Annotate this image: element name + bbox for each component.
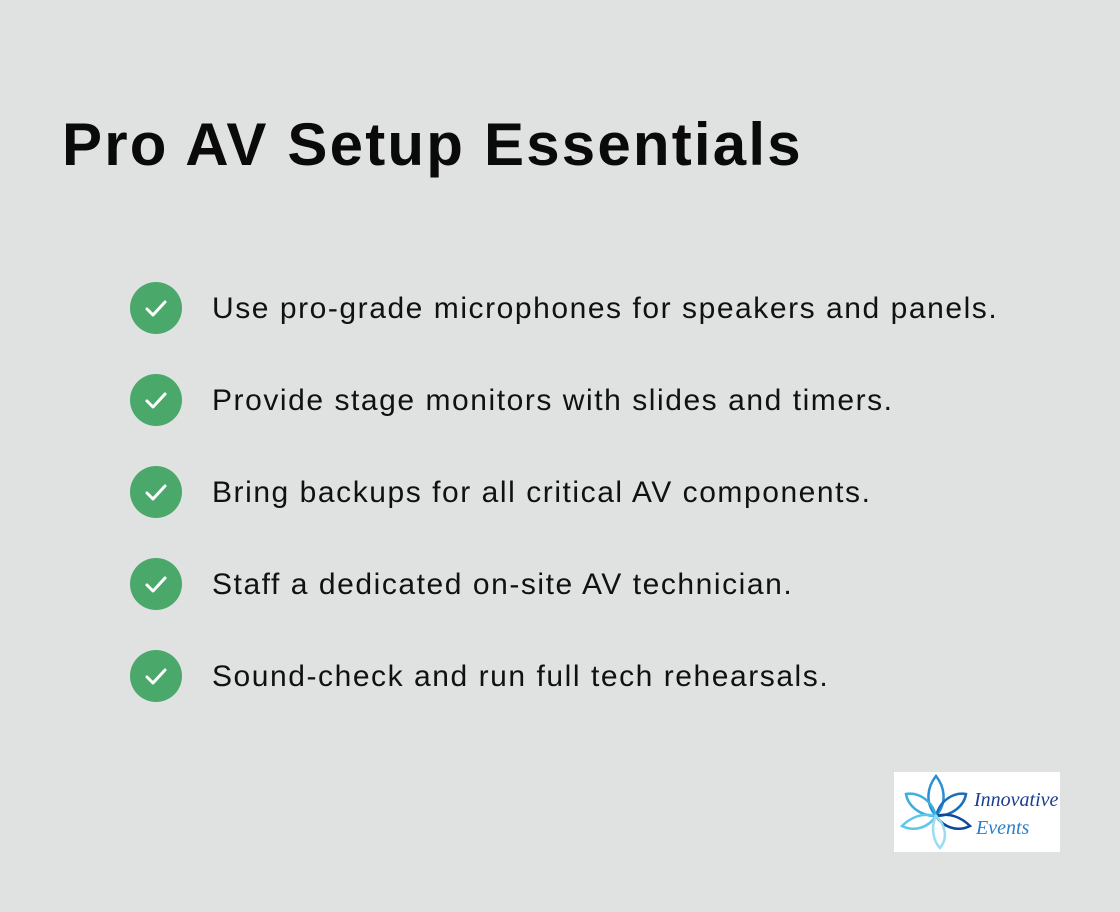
logo: Events (975, 817, 1030, 839)
item 2 (130, 374, 894, 426)
item 4: Staff a dedicated on-site AV technician. (212, 568, 793, 601)
item 2: Provide stage monitors with slides and timers. (212, 384, 894, 417)
item 3: Bring backups for all critical AV components. (212, 476, 871, 509)
title: Pro AV Setup Essentials (62, 111, 803, 178)
item 5: Sound-check and run full tech rehearsals. (212, 660, 829, 693)
logo (894, 772, 1060, 852)
item 1: Use pro-grade microphones for speakers and panels. (212, 292, 998, 325)
item 4 (130, 558, 793, 610)
item 5 (130, 650, 829, 702)
logo: Innovative (973, 789, 1059, 811)
item 3 (130, 466, 871, 518)
item 1 (130, 282, 998, 334)
